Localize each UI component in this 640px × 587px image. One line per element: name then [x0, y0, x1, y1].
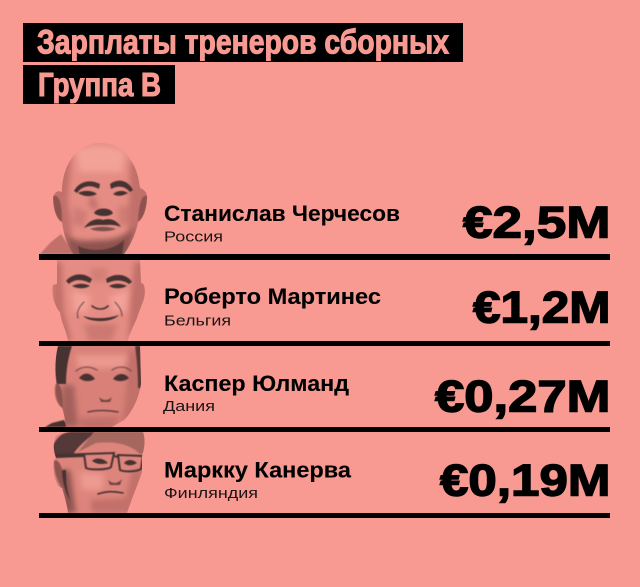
coach name: Маркку Канерва	[164, 458, 352, 482]
salary: €2,5M	[463, 198, 610, 248]
rule	[39, 254, 610, 260]
row: Roberto Martinez	[39, 258, 610, 346]
salary: €0,19M	[440, 456, 610, 506]
portrait: Hjulmand	[44, 346, 141, 427]
row: Kasper Hjulmand	[39, 344, 610, 432]
rule	[39, 427, 610, 432]
salary: €0,27M	[435, 372, 610, 422]
country: Дания	[163, 398, 215, 415]
row: Markku Kanerva	[39, 430, 610, 518]
portrait: Kanerva	[54, 432, 144, 513]
country: Бельгия	[164, 312, 231, 330]
subtitle: group B: Группа B	[38, 66, 161, 103]
country: Финляндия	[164, 485, 258, 502]
rule	[39, 513, 610, 518]
row: Stanislav Cherchesov	[39, 140, 610, 260]
portrait: Cherchesov	[40, 140, 150, 258]
coach name: Каспер Юлманд	[164, 371, 349, 396]
salary: €1,2M	[473, 284, 610, 332]
coach name: Станислав Черчесов	[164, 201, 400, 226]
portrait: Martinez	[52, 260, 145, 341]
title: salaries of national team coaches: Зарплаты тренеров сборных	[37, 24, 449, 62]
rule	[39, 341, 610, 346]
coach name: Роберто Мартинес	[164, 284, 381, 309]
country: Россия	[164, 228, 223, 246]
